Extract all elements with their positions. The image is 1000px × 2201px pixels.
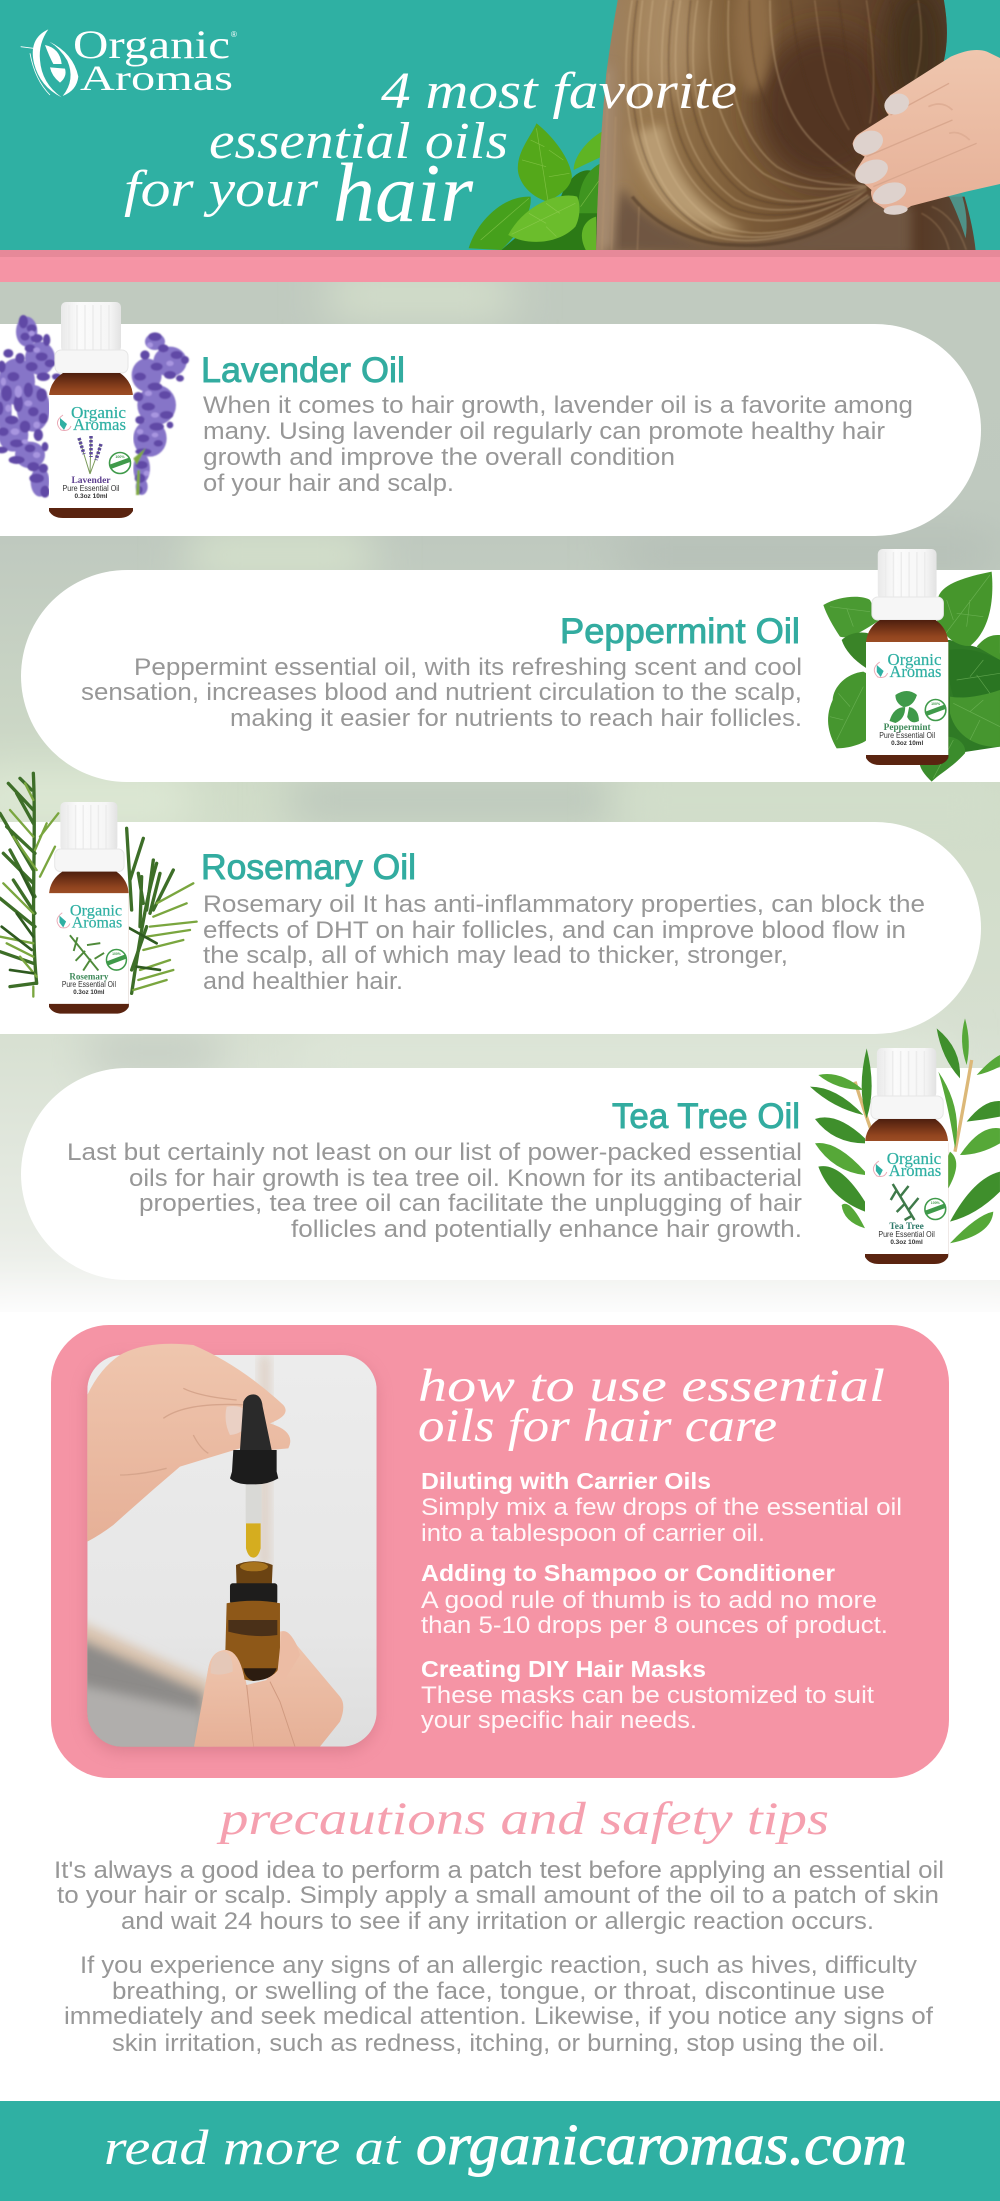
body text: the scalp, all of which may lead to thicker, stronger,	[203, 942, 788, 969]
body text: Last but certainly not least on our list of power-packed essential	[67, 1139, 802, 1166]
icon: tea tree bottle: 0.3oz 10ml	[890, 1239, 923, 1246]
tip: diluting with carrier oils: into a tablespoon of carrier oil.	[421, 1520, 765, 1547]
panel: Lavender Oil card	[0, 302, 981, 536]
icon: rosemary sprigs	[0, 773, 197, 997]
body text: properties, tea tree oil can facilitate the unplugging of hair	[139, 1190, 802, 1217]
organic badge: 100%	[115, 455, 125, 459]
heading: Rosemary Oil	[201, 848, 416, 887]
panel: Peppermint Oil card	[21, 549, 1000, 782]
title: essential oils	[209, 113, 508, 170]
text block: allergic reactions: skin irritation, such as redness, itching, or burning, stop using the oil.	[112, 2030, 885, 2057]
icon: rosemary bottle	[49, 802, 129, 1014]
panel: how to use essential oils	[51, 1325, 949, 1778]
text block: allergic reactions: immediately and seek medical attention. Likewise, if you notice any signs of	[64, 2003, 933, 2030]
icon: lavender bottle: Lavender	[71, 476, 111, 486]
logo wordmark: Organic	[73, 22, 230, 67]
tip: adding to shampoo or conditioner	[421, 1560, 888, 1639]
photo: dropper and bottle	[73, 1344, 377, 1768]
text block: allergic reactions: If you experience any signs of an allergic reaction, such as hives, difficulty	[80, 1952, 917, 1979]
body text: many. Using lavender oil regularly can promote healthy hair	[203, 418, 885, 445]
panel: Rosemary Oil card	[0, 773, 981, 1034]
icon: tea tree sprigs	[810, 1018, 1000, 1243]
body text: of your hair and scalp.	[203, 470, 454, 497]
tip: adding to shampoo or conditioner: A good rule of thumb is to add no more	[421, 1587, 877, 1614]
icon: rosemary bottle: Pure Essential Oil	[62, 980, 116, 989]
body text: follicles and potentially enhance hair growth.	[291, 1216, 802, 1243]
body text: Peppermint essential oil, with its refreshing scent and cool	[134, 654, 802, 681]
thumb over bottle	[195, 1650, 253, 1747]
heading: Tea Tree Oil	[612, 1097, 800, 1136]
heading: precautions and safety tips: precautions and safety tips	[216, 1793, 829, 1845]
footer background	[0, 2101, 1000, 2201]
heading: Peppermint Oil	[560, 612, 800, 651]
hand holding hair	[849, 50, 1000, 216]
footer text: organicaromas.com	[416, 2112, 907, 2177]
icon: rosemary bottle: Rosemary	[69, 971, 109, 981]
title: for your	[124, 161, 319, 218]
footer text	[104, 2112, 907, 2177]
mint leaves behind hair	[469, 123, 605, 250]
hair	[596, 0, 976, 257]
organic badge: 100%	[931, 1201, 941, 1205]
card background	[21, 1068, 1000, 1280]
organic badge	[925, 700, 947, 720]
icon: peppermint bottle: Peppermint	[884, 723, 932, 733]
title: hair	[333, 147, 473, 240]
header banner	[0, 0, 1000, 282]
icon: lavender bottle: Organic	[71, 403, 126, 422]
dropper bulb	[240, 1394, 272, 1450]
icon: peppermint bottle: Organic	[888, 650, 941, 669]
icon: rosemary bottle: Aromas	[72, 914, 122, 932]
body text	[203, 891, 925, 995]
butterfly icon	[21, 29, 78, 97]
icon: peppermint bottle: Aromas	[890, 662, 941, 681]
dropper cap	[230, 1450, 278, 1484]
body text: oils for hair growth is tea tree oil. Known for its antibacterial	[129, 1165, 802, 1192]
text block: patch test: and wait 24 hours to see if any irritation or allergic reaction occurs.	[121, 1908, 874, 1935]
pink panel background	[51, 1325, 949, 1778]
body text	[81, 654, 802, 732]
icon: tea tree bottle: Tea Tree	[889, 1222, 924, 1232]
tip: adding to shampoo or conditioner: than 5-10 drops per 8 ounces of product.	[421, 1612, 888, 1639]
icon: peppermint bottle: Pure Essential Oil	[879, 731, 935, 740]
body text: When it comes to hair growth, lavender oil is a favorite among	[203, 392, 913, 419]
title	[124, 63, 737, 240]
section heading: how to use essential	[418, 1360, 885, 1412]
mini tea tree sprig	[891, 1184, 918, 1220]
body text: Rosemary oil It has anti-inflammatory properties, can block the	[203, 891, 925, 918]
band shadow	[0, 250, 1000, 257]
upper hand	[87, 1344, 290, 1542]
tip: diluting with carrier oils	[421, 1468, 902, 1547]
icon: rosemary bottle: Organic	[70, 902, 122, 920]
body text: and healthier hair.	[203, 968, 403, 995]
section heading	[418, 1360, 885, 1452]
text block: patch test: to your hair or scalp. Simply apply a small amount of the oil to a patch of skin	[57, 1882, 939, 1909]
icon: tea tree bottle: Aromas	[889, 1161, 941, 1180]
icon: peppermint bottle: 0.3oz 10ml	[891, 740, 923, 747]
body text: effects of DHT on hair follicles, and can improve blood flow in	[203, 917, 906, 944]
hair strands	[602, 0, 966, 250]
text block: allergic reactions	[64, 1952, 933, 2057]
card background	[21, 570, 1000, 782]
text block: patch test	[54, 1857, 944, 1935]
icon: rosemary bottle: 0.3oz 10ml	[73, 989, 105, 996]
section heading: oils for hair care	[418, 1400, 777, 1452]
text block: patch test: It's always a good idea to perform a patch test before applying an essential oil	[54, 1857, 944, 1884]
icon: lavender sprigs	[0, 315, 189, 498]
organic badge	[106, 949, 127, 970]
icon: lavender bottle: Aromas	[73, 415, 126, 434]
icon: peppermint leaves	[823, 572, 1000, 782]
tip: diluting with carrier oils: Simply mix a few drops of the essential oil	[421, 1494, 902, 1521]
body text	[203, 392, 913, 497]
mini lavender sprig	[79, 436, 101, 474]
mini rosemary sprig	[70, 935, 104, 971]
organic badge	[109, 452, 131, 474]
footer text: read more at	[104, 2119, 401, 2175]
title: 4 most favorite	[381, 63, 737, 120]
hair shading	[596, 0, 949, 257]
panel: Tea Tree Oil card	[21, 1018, 1000, 1280]
body text	[67, 1139, 802, 1243]
nails	[849, 90, 913, 216]
logo: Organic Aromas: Aromas	[80, 58, 233, 98]
icon: tea tree bottle: Organic	[887, 1149, 941, 1168]
body text: sensation, increases blood and nutrient circulation to the scalp,	[81, 679, 802, 706]
tip: creating DIY hair masks: These masks can be customized to suit	[421, 1682, 874, 1709]
icon: lavender bottle: Pure Essential Oil	[62, 484, 120, 493]
icon: lavender bottle: 0.3oz 10ml	[75, 493, 108, 500]
icon: peppermint bottle	[866, 549, 948, 765]
logo: Organic Aromas	[21, 22, 237, 98]
text block: allergic reactions: breathing, or swelling of the face, tongue, or throat, discontinue use	[112, 1978, 885, 2005]
tip: creating DIY hair masks	[421, 1656, 874, 1734]
teal gap between hair and hand	[949, 193, 967, 238]
icon: tea tree bottle	[865, 1048, 948, 1264]
mini mint sprig	[890, 691, 919, 723]
glass pipette	[246, 1485, 262, 1523]
organic badge: 100%	[931, 702, 941, 706]
footer banner	[0, 2101, 1000, 2201]
amber bottle	[236, 1561, 273, 1588]
icon: lavender bottle	[49, 302, 133, 518]
body text: growth and improve the overall condition	[203, 444, 675, 471]
organic badge: 100%	[112, 952, 121, 956]
tip: adding to shampoo or conditioner: Adding to Shampoo or Conditioner	[421, 1560, 835, 1586]
pink band	[0, 250, 1000, 282]
organic badge	[924, 1198, 946, 1220]
teal header background	[0, 0, 1000, 250]
body text: making it easier for nutrients to reach hair follicles.	[230, 705, 802, 732]
tip: creating DIY hair masks: your specific hair needs.	[421, 1707, 697, 1734]
tip: diluting with carrier oils: Diluting with Carrier Oils	[421, 1468, 711, 1494]
card background	[0, 324, 981, 536]
icon: tea tree bottle: Pure Essential Oil	[878, 1230, 935, 1239]
lower hand	[194, 1631, 343, 1747]
tip: creating DIY hair masks: Creating DIY Hair Masks	[421, 1656, 706, 1682]
blurred herb backdrop	[0, 270, 1000, 1370]
card background	[0, 822, 981, 1034]
heading: Lavender Oil	[201, 351, 405, 390]
logo: Organic Aromas: ®	[231, 30, 237, 39]
